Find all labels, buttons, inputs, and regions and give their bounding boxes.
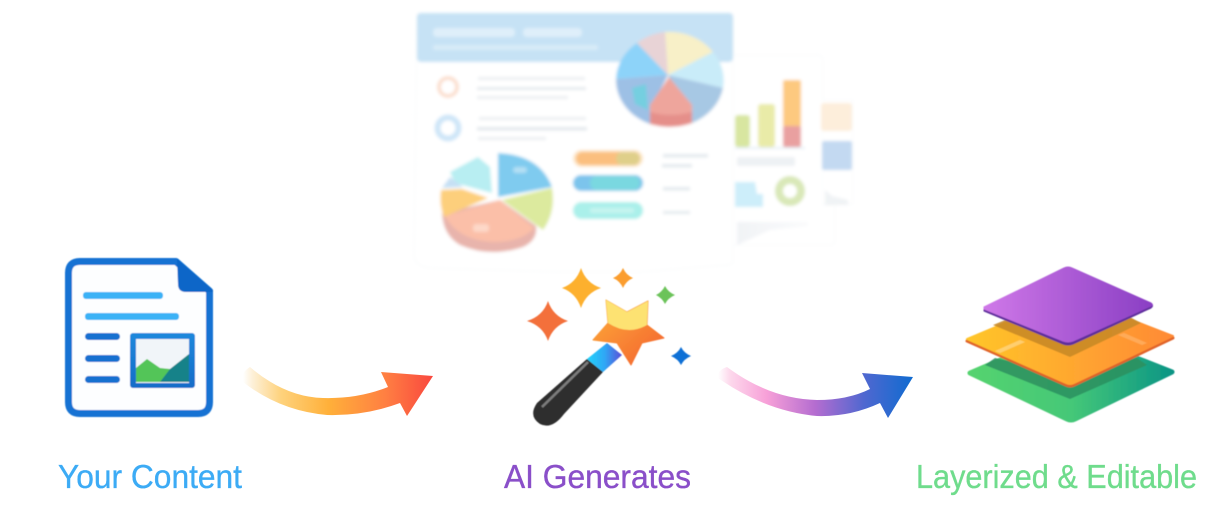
legend labels xyxy=(662,154,708,214)
orange sparkle xyxy=(527,301,568,341)
picture thumbnail xyxy=(130,333,195,388)
arrow: AI to layers xyxy=(718,367,913,418)
bar chart caption xyxy=(737,157,795,166)
green layer xyxy=(970,331,1172,420)
handle highlight xyxy=(542,362,588,407)
wand tip xyxy=(587,343,622,372)
top pie chart xyxy=(616,32,724,127)
blue square xyxy=(822,141,852,170)
text lines xyxy=(85,333,120,383)
back report card xyxy=(730,55,853,245)
yellow sparkle xyxy=(562,268,601,308)
bar chart xyxy=(735,80,805,149)
label: Your Content: Your Content xyxy=(58,458,242,495)
icon: stacked layers xyxy=(967,267,1173,420)
label: Layerized & Editable: Layerized & Editable xyxy=(916,458,1197,495)
document sheet xyxy=(68,262,210,414)
main report card xyxy=(414,14,733,272)
grey wedge xyxy=(737,222,808,245)
peach square xyxy=(821,103,852,131)
green ring xyxy=(779,180,801,202)
label: AI Generates: AI Generates xyxy=(504,458,691,495)
purple layer xyxy=(984,267,1152,345)
legend pills xyxy=(573,150,643,219)
star xyxy=(593,300,664,365)
lower pie chart xyxy=(440,153,553,252)
header band xyxy=(417,13,733,62)
heading lines xyxy=(83,292,179,320)
arrow: content to AI xyxy=(242,367,433,416)
list item two xyxy=(438,117,587,140)
wand handle xyxy=(533,359,603,426)
list item one xyxy=(439,77,586,99)
folded corner xyxy=(177,259,213,292)
green sparkle xyxy=(656,286,675,304)
cyan block xyxy=(735,182,763,207)
blurred dashboard preview xyxy=(414,13,853,272)
small grey shape xyxy=(825,190,848,205)
orange layer xyxy=(967,296,1173,386)
icon: magic wand xyxy=(527,268,691,426)
icon: document with picture xyxy=(68,259,213,414)
blue sparkle xyxy=(671,347,691,365)
small orange sparkle xyxy=(613,268,633,288)
